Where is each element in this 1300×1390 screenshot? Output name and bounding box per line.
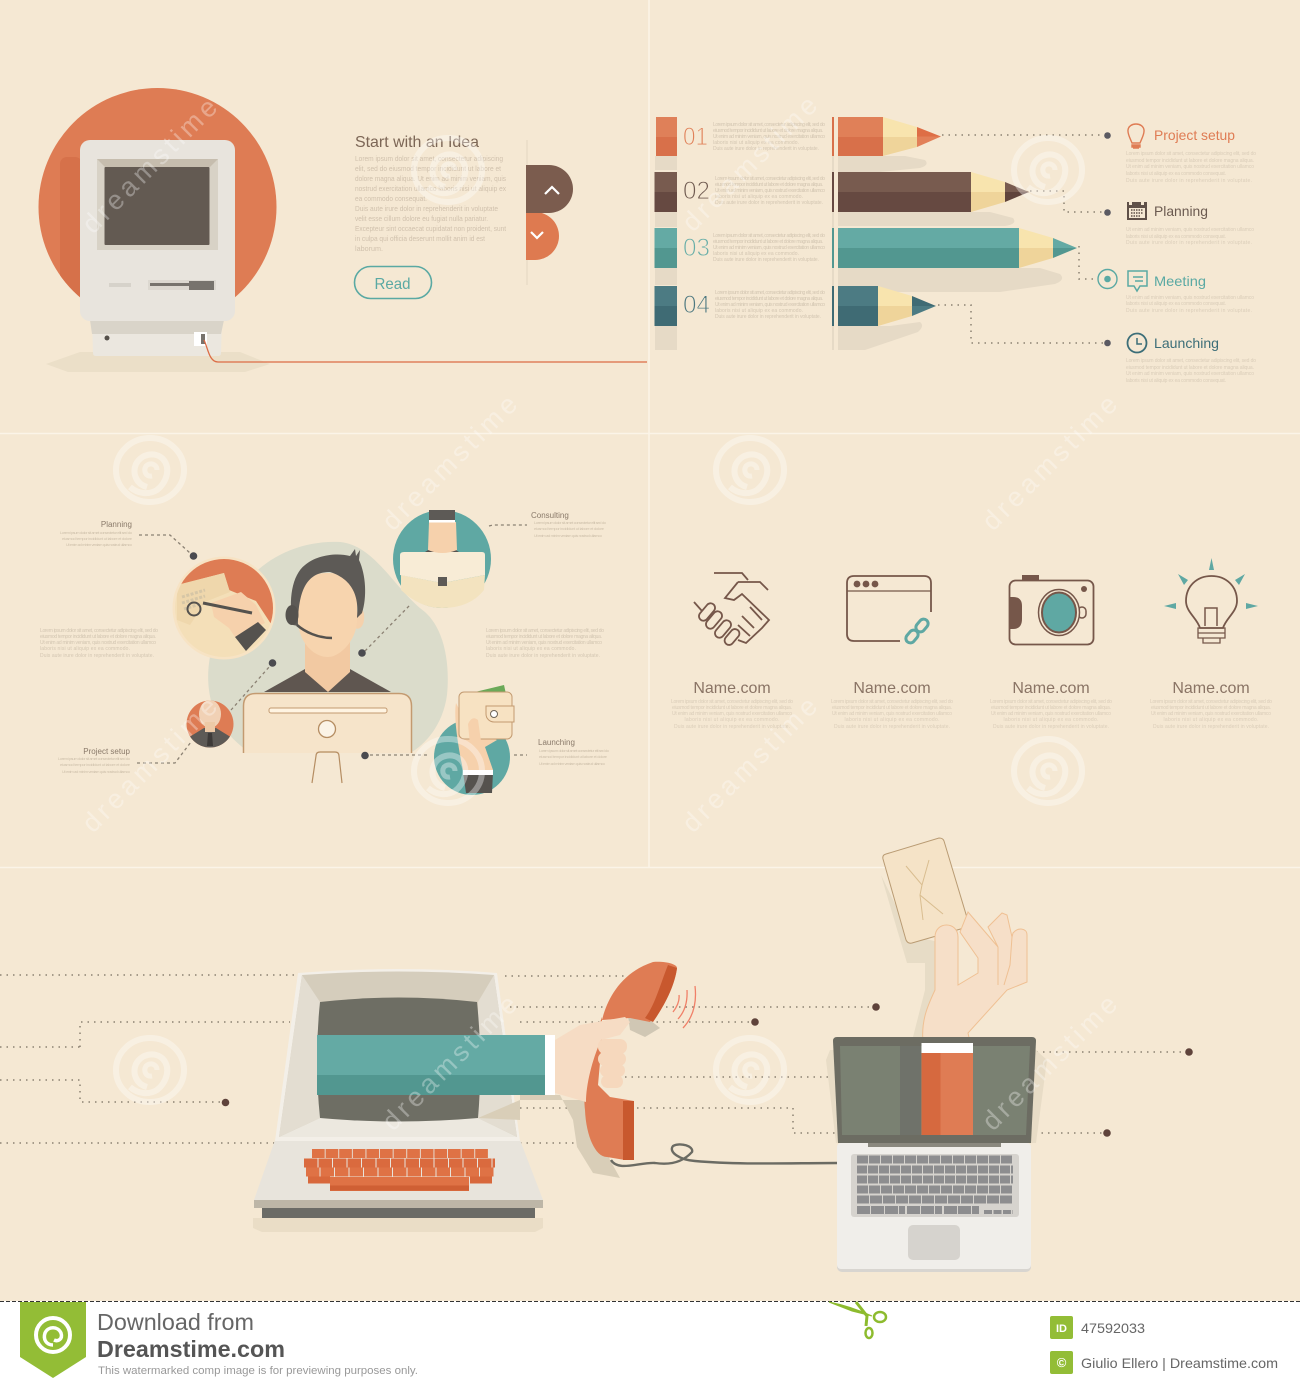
step descriptions: Ut enim ad minim veniam, quis nostrud exercitation ullamco [715, 188, 825, 194]
step descriptions: Duis aute irure dolor in reprehenderit in voluptate. [713, 257, 819, 263]
step descriptions: eiusmod tempor incididunt ut labore et dolore magna aliqua. [715, 296, 823, 302]
step numbers: 01 [683, 123, 708, 151]
icon: bulb [1128, 124, 1144, 148]
name headings: Name.com [693, 680, 771, 697]
step descriptions: Lorem ipsum dolor sit amet, consectetur adipiscing elit, sed do [715, 176, 825, 182]
connector dots [190, 552, 369, 759]
watermark text: dreamstime [376, 989, 523, 1136]
orange circle [38, 88, 276, 326]
panel: four icons [671, 558, 1272, 730]
heading: Start with an Idea [355, 134, 479, 151]
support descriptions: Ut enim ad minim veniam quis nostrud ullamco [66, 542, 133, 547]
agent figure [264, 549, 391, 692]
label descriptions: Ut enim ad minim veniam, quis nostrud exercitation ullamco [1126, 164, 1254, 170]
panel: communication [0, 838, 1193, 1272]
circle labels: Project setup [83, 747, 131, 756]
step numbers: 02 [683, 177, 710, 205]
image id: 47592033 [1081, 1320, 1145, 1336]
watermark text [76, 90, 1123, 1136]
step descriptions: Lorem ipsum dolor sit amet, consectetur adipiscing elit, sed do [715, 290, 825, 296]
author credit: © [1057, 1355, 1067, 1370]
icon: handshake [694, 573, 769, 647]
step numbers: 04 [683, 291, 710, 319]
keyboard keys [304, 1154, 495, 1188]
name descriptions: Duis aute irure dolor in reprehenderit in voluptate. [834, 724, 950, 730]
pencil: meeting [832, 228, 1077, 268]
image id: ID [1056, 1323, 1067, 1335]
watermark text: dreamstime [376, 389, 523, 536]
watermark text: dreamstime [76, 92, 223, 239]
watermark text: dreamstime [976, 989, 1123, 1136]
name headings: Name.com [1172, 680, 1250, 697]
laptop [826, 1037, 1047, 1272]
footer [0, 1301, 1300, 1390]
icon: speech bubble [1128, 271, 1147, 291]
label descriptions: laboris nisi ut aliquip ex ea commodo consequat. [1126, 301, 1226, 307]
name descriptions: eiusmod tempor incididunt ut labore et dolore magna aliqua. [991, 705, 1111, 711]
left paragraph: Ut enim ad minim veniam, quis nostrud exercitation ullamco [40, 640, 156, 646]
icon: browser window [847, 576, 931, 645]
badge [20, 1302, 86, 1378]
support descriptions: eiusmod tempor incididunt ut labore et dolore [60, 762, 131, 767]
name headings: Name.com [853, 680, 931, 697]
download text [97, 1309, 418, 1377]
teal sleeve [317, 1035, 555, 1095]
body text: Duis aute irure dolor in reprehenderit in voluptate [355, 204, 498, 213]
name descriptions: Duis aute irure dolor in reprehenderit in voluptate. [1153, 724, 1269, 730]
support descriptions: eiusmod tempor incididunt ut labore et dolore [539, 754, 608, 759]
body text: elit, sed do eiusmod tempor incididunt ut labore et [355, 164, 502, 173]
right paragraph: laboris nisi ut aliquip ex ea commodo. [486, 646, 576, 652]
icon: clock [1128, 334, 1146, 352]
name descriptions: Ut enim ad minim veniam, quis nostrud exercitation ullamco [1151, 711, 1271, 717]
envelope [883, 838, 968, 943]
hand with phone [555, 962, 677, 1160]
scroll control [526, 165, 573, 260]
dashed connectors [137, 525, 527, 763]
step labels: Meeting [1154, 273, 1206, 289]
floor shadow [46, 352, 270, 372]
number bars [654, 117, 677, 326]
label descriptions: Lorem ipsum dolor sit amet, consectetur adipiscing elit, sed do [1126, 151, 1256, 157]
background blob [208, 542, 448, 753]
step descriptions: Lorem ipsum dolor sit amet, consectetur adipiscing elit, sed do [713, 122, 825, 128]
step labels: Launching [1154, 335, 1219, 351]
step descriptions: laboris nisi ut aliquip ex ea commodo. [715, 308, 803, 314]
project setup circle [186, 700, 234, 748]
watermark spirals [116, 138, 1082, 1102]
pencil: launching [832, 286, 936, 326]
step descriptions: laboris nisi ut aliquip ex ea commodo. [713, 251, 799, 257]
body text: laborum. [355, 244, 383, 253]
label descriptions: Ut enim ad minim veniam, quis nostrud exercitation ullamco [1126, 227, 1254, 233]
read button [354, 266, 432, 298]
arm and phone shadow [478, 1095, 620, 1178]
read button: Read [374, 276, 410, 293]
phone cord [611, 1144, 838, 1166]
circle labels: Consulting [531, 511, 569, 520]
body text: velit esse cillum dolore eu fugiat nulla pariatur. [355, 214, 488, 223]
name descriptions: Duis aute irure dolor in reprehenderit in voluptate. [674, 724, 790, 730]
support descriptions [58, 520, 610, 774]
retro computer [80, 140, 235, 356]
connector lines [938, 132, 1117, 346]
author credit [1050, 1351, 1278, 1374]
name descriptions: eiusmod tempor incididunt ut labore et dolore magna aliqua. [672, 705, 792, 711]
name descriptions: eiusmod tempor incididunt ut labore et dolore magna aliqua. [832, 705, 952, 711]
name descriptions: Ut enim ad minim veniam, quis nostrud exercitation ullamco [991, 711, 1111, 717]
support descriptions: Lorem ipsum dolor sit amet consectetur elit sed do [58, 756, 131, 761]
step descriptions: Ut enim ad minim veniam, quis nostrud exercitation ullamco [713, 134, 825, 140]
support descriptions: Lorem ipsum dolor sit amet consectetur elit sed do [539, 748, 610, 753]
step numbers: 03 [683, 234, 710, 262]
right paragraph: Lorem ipsum dolor sit amet, consectetur adipiscing elit, sed do [486, 628, 604, 634]
name descriptions [671, 699, 1272, 730]
name descriptions: Lorem ipsum dolor sit amet, consectetur adipiscing elit, sed do [671, 699, 793, 705]
support descriptions: Ut enim ad minim veniam quis nostrud ullamco [62, 769, 131, 774]
author credit: Giulio Ellero | Dreamstime.com [1081, 1355, 1278, 1371]
cable [204, 340, 647, 362]
right paragraph: Duis aute irure dolor in reprehenderit in voluptate. [486, 653, 600, 659]
step labels [1154, 127, 1235, 351]
body text [355, 154, 507, 253]
download text: Dreamstime.com [97, 1336, 285, 1362]
body text: ea commodo consequat. [355, 194, 427, 203]
pencil shadows [655, 117, 834, 350]
monitor [244, 694, 412, 783]
support descriptions: eiusmod tempor incididunt ut labore et dolore [62, 536, 133, 541]
step labels: Planning [1154, 203, 1208, 219]
hand holding envelope [923, 912, 1027, 1042]
panel: customer support [40, 510, 610, 795]
label descriptions: Ut enim ad minim veniam, quis nostrud exercitation ullamco [1126, 295, 1254, 301]
step descriptions: eiusmod tempor incididunt ut labore et dolore magna aliqua. [713, 239, 823, 245]
support descriptions: Lorem ipsum dolor sit amet consectetur elit sed do [60, 530, 133, 535]
watermark text: dreamstime [976, 389, 1123, 536]
step descriptions: Ut enim ad minim veniam, quis nostrud exercitation ullamco [715, 302, 825, 308]
label descriptions: eiusmod tempor incididunt ut labore et dolore magna aliqua. [1126, 365, 1254, 371]
circle labels: Planning [101, 520, 132, 529]
step descriptions: Ut enim ad minim veniam, quis nostrud exercitation ullamco [713, 245, 825, 251]
label descriptions: Duis aute irure dolor in reprehenderit in voluptate. [1126, 178, 1252, 184]
step descriptions: laboris nisi ut aliquip ex ea commodo. [713, 140, 799, 146]
name descriptions: laboris nisi ut aliquip ex ea commodo. [1004, 717, 1098, 723]
name descriptions: Ut enim ad minim veniam, quis nostrud exercitation ullamco [832, 711, 952, 717]
watermark text: dreamstime [676, 90, 823, 237]
image id [1050, 1316, 1145, 1339]
circle labels [83, 511, 575, 756]
consulting circle [393, 510, 491, 608]
label descriptions: laboris nisi ut aliquip ex ea commodo consequat. [1126, 234, 1226, 240]
watermark text: dreamstime [76, 691, 223, 838]
step descriptions: eiusmod tempor incididunt ut labore et dolore magna aliqua. [715, 182, 823, 188]
support descriptions: Ut enim ad minim veniam quis nostrud ullamco [534, 533, 603, 538]
right paragraph: eiusmod tempor incididunt ut labore et dolore magna aliqua. [486, 634, 602, 640]
planning circle [172, 556, 276, 660]
label descriptions: Ut enim ad minim veniam, quis nostrud exercitation ullamco [1126, 371, 1254, 377]
step descriptions: Duis aute irure dolor in reprehenderit in voluptate. [715, 314, 821, 320]
panel: pencil chart [654, 117, 1256, 384]
step descriptions: eiusmod tempor incididunt ut labore et dolore magna aliqua. [713, 128, 823, 134]
icon: light bulb [1164, 558, 1258, 643]
right paragraph [486, 628, 604, 659]
step descriptions: laboris nisi ut aliquip ex ea commodo. [715, 194, 803, 200]
step descriptions [713, 122, 825, 320]
step labels: Project setup [1154, 127, 1235, 143]
label descriptions: Duis aute irure dolor in reprehenderit in voluptate. [1126, 308, 1252, 314]
left paragraph [40, 628, 158, 659]
body text: Excepteur sint occaecat cupidatat non proident, sunt [355, 224, 507, 233]
step descriptions: Duis aute irure dolor in reprehenderit in voluptate. [713, 146, 819, 152]
name descriptions: eiusmod tempor incididunt ut labore et dolore magna aliqua. [1151, 705, 1271, 711]
body text: dolore magna aliqua. Ut enim ad minim veniam, quis [355, 174, 506, 183]
name descriptions: laboris nisi ut aliquip ex ea commodo. [844, 717, 940, 723]
sound waves [673, 986, 696, 1028]
retro terminal [253, 969, 543, 1232]
label descriptions: eiusmod tempor incididunt ut labore et dolore magna aliqua. [1126, 158, 1254, 164]
label descriptions [1126, 151, 1256, 384]
launching circle [434, 685, 514, 795]
step descriptions: Lorem ipsum dolor sit amet, consectetur adipiscing elit, sed do [713, 233, 825, 239]
body text: nostrud exercitation ullamco laboris nisi ut aliquip ex [355, 184, 506, 193]
support descriptions: Ut enim ad minim veniam quis nostrud ullamco [539, 761, 606, 766]
watermark text: dreamstime [676, 691, 823, 838]
label descriptions: laboris nisi ut aliquip ex ea commodo consequat. [1126, 378, 1226, 384]
icon: calendar [1127, 201, 1147, 220]
icon: camera [1010, 575, 1094, 644]
support descriptions: eiusmod tempor incididunt ut labore et dolore [534, 526, 605, 531]
name descriptions: Lorem ipsum dolor sit amet, consectetur adipiscing elit, sed do [990, 699, 1112, 705]
left paragraph: eiusmod tempor incididunt ut labore et dolore magna aliqua. [40, 634, 156, 640]
pencil: planning [832, 172, 1029, 212]
name descriptions: laboris nisi ut aliquip ex ea commodo. [684, 717, 780, 723]
pencil: project setup [832, 117, 941, 156]
name descriptions: Ut enim ad minim veniam, quis nostrud exercitation ullamco [672, 711, 792, 717]
step numbers [683, 123, 710, 319]
name descriptions: laboris nisi ut aliquip ex ea commodo. [1164, 717, 1258, 723]
left paragraph: laboris nisi ut aliquip ex ea commodo. [40, 646, 130, 652]
red sleeve [922, 1043, 973, 1135]
right paragraph: Ut enim ad minim veniam, quis nostrud exercitation ullamco [486, 640, 602, 646]
support descriptions: Lorem ipsum dolor sit amet consectetur elit sed do [534, 520, 607, 525]
name headings [693, 680, 1250, 697]
envelope shadow and hand shadow [881, 875, 950, 1037]
label descriptions: Duis aute irure dolor in reprehenderit in voluptate. [1126, 240, 1252, 246]
name headings: Name.com [1012, 680, 1090, 697]
panel: start with an idea [38, 88, 647, 372]
left paragraph: Duis aute irure dolor in reprehenderit in voluptate. [40, 653, 154, 659]
circle labels: Launching [538, 738, 575, 747]
body text: in culpa qui officia deserunt mollit anim id est [355, 234, 486, 243]
body text: Lorem ipsum dolor sit amet, consectetur adipiscing [355, 154, 503, 163]
name descriptions: Duis aute irure dolor in reprehenderit in voluptate. [993, 724, 1109, 730]
step descriptions: Duis aute irure dolor in reprehenderit in voluptate. [715, 200, 823, 206]
left paragraph: Lorem ipsum dolor sit amet, consectetur adipiscing elit, sed do [40, 628, 158, 634]
label descriptions: laboris nisi ut aliquip ex ea commodo consequat. [1126, 171, 1226, 177]
download text: Download from [97, 1309, 254, 1335]
name descriptions: Lorem ipsum dolor sit amet, consectetur adipiscing elit, sed do [1150, 699, 1272, 705]
label descriptions: Lorem ipsum dolor sit amet, consectetur adipiscing elit, sed do [1126, 358, 1256, 364]
dotted lines [0, 975, 1193, 1143]
download text: This watermarked comp image is for previewing purposes only. [98, 1365, 418, 1377]
name descriptions: Lorem ipsum dolor sit amet, consectetur adipiscing elit, sed do [831, 699, 953, 705]
scissors [829, 1302, 886, 1338]
